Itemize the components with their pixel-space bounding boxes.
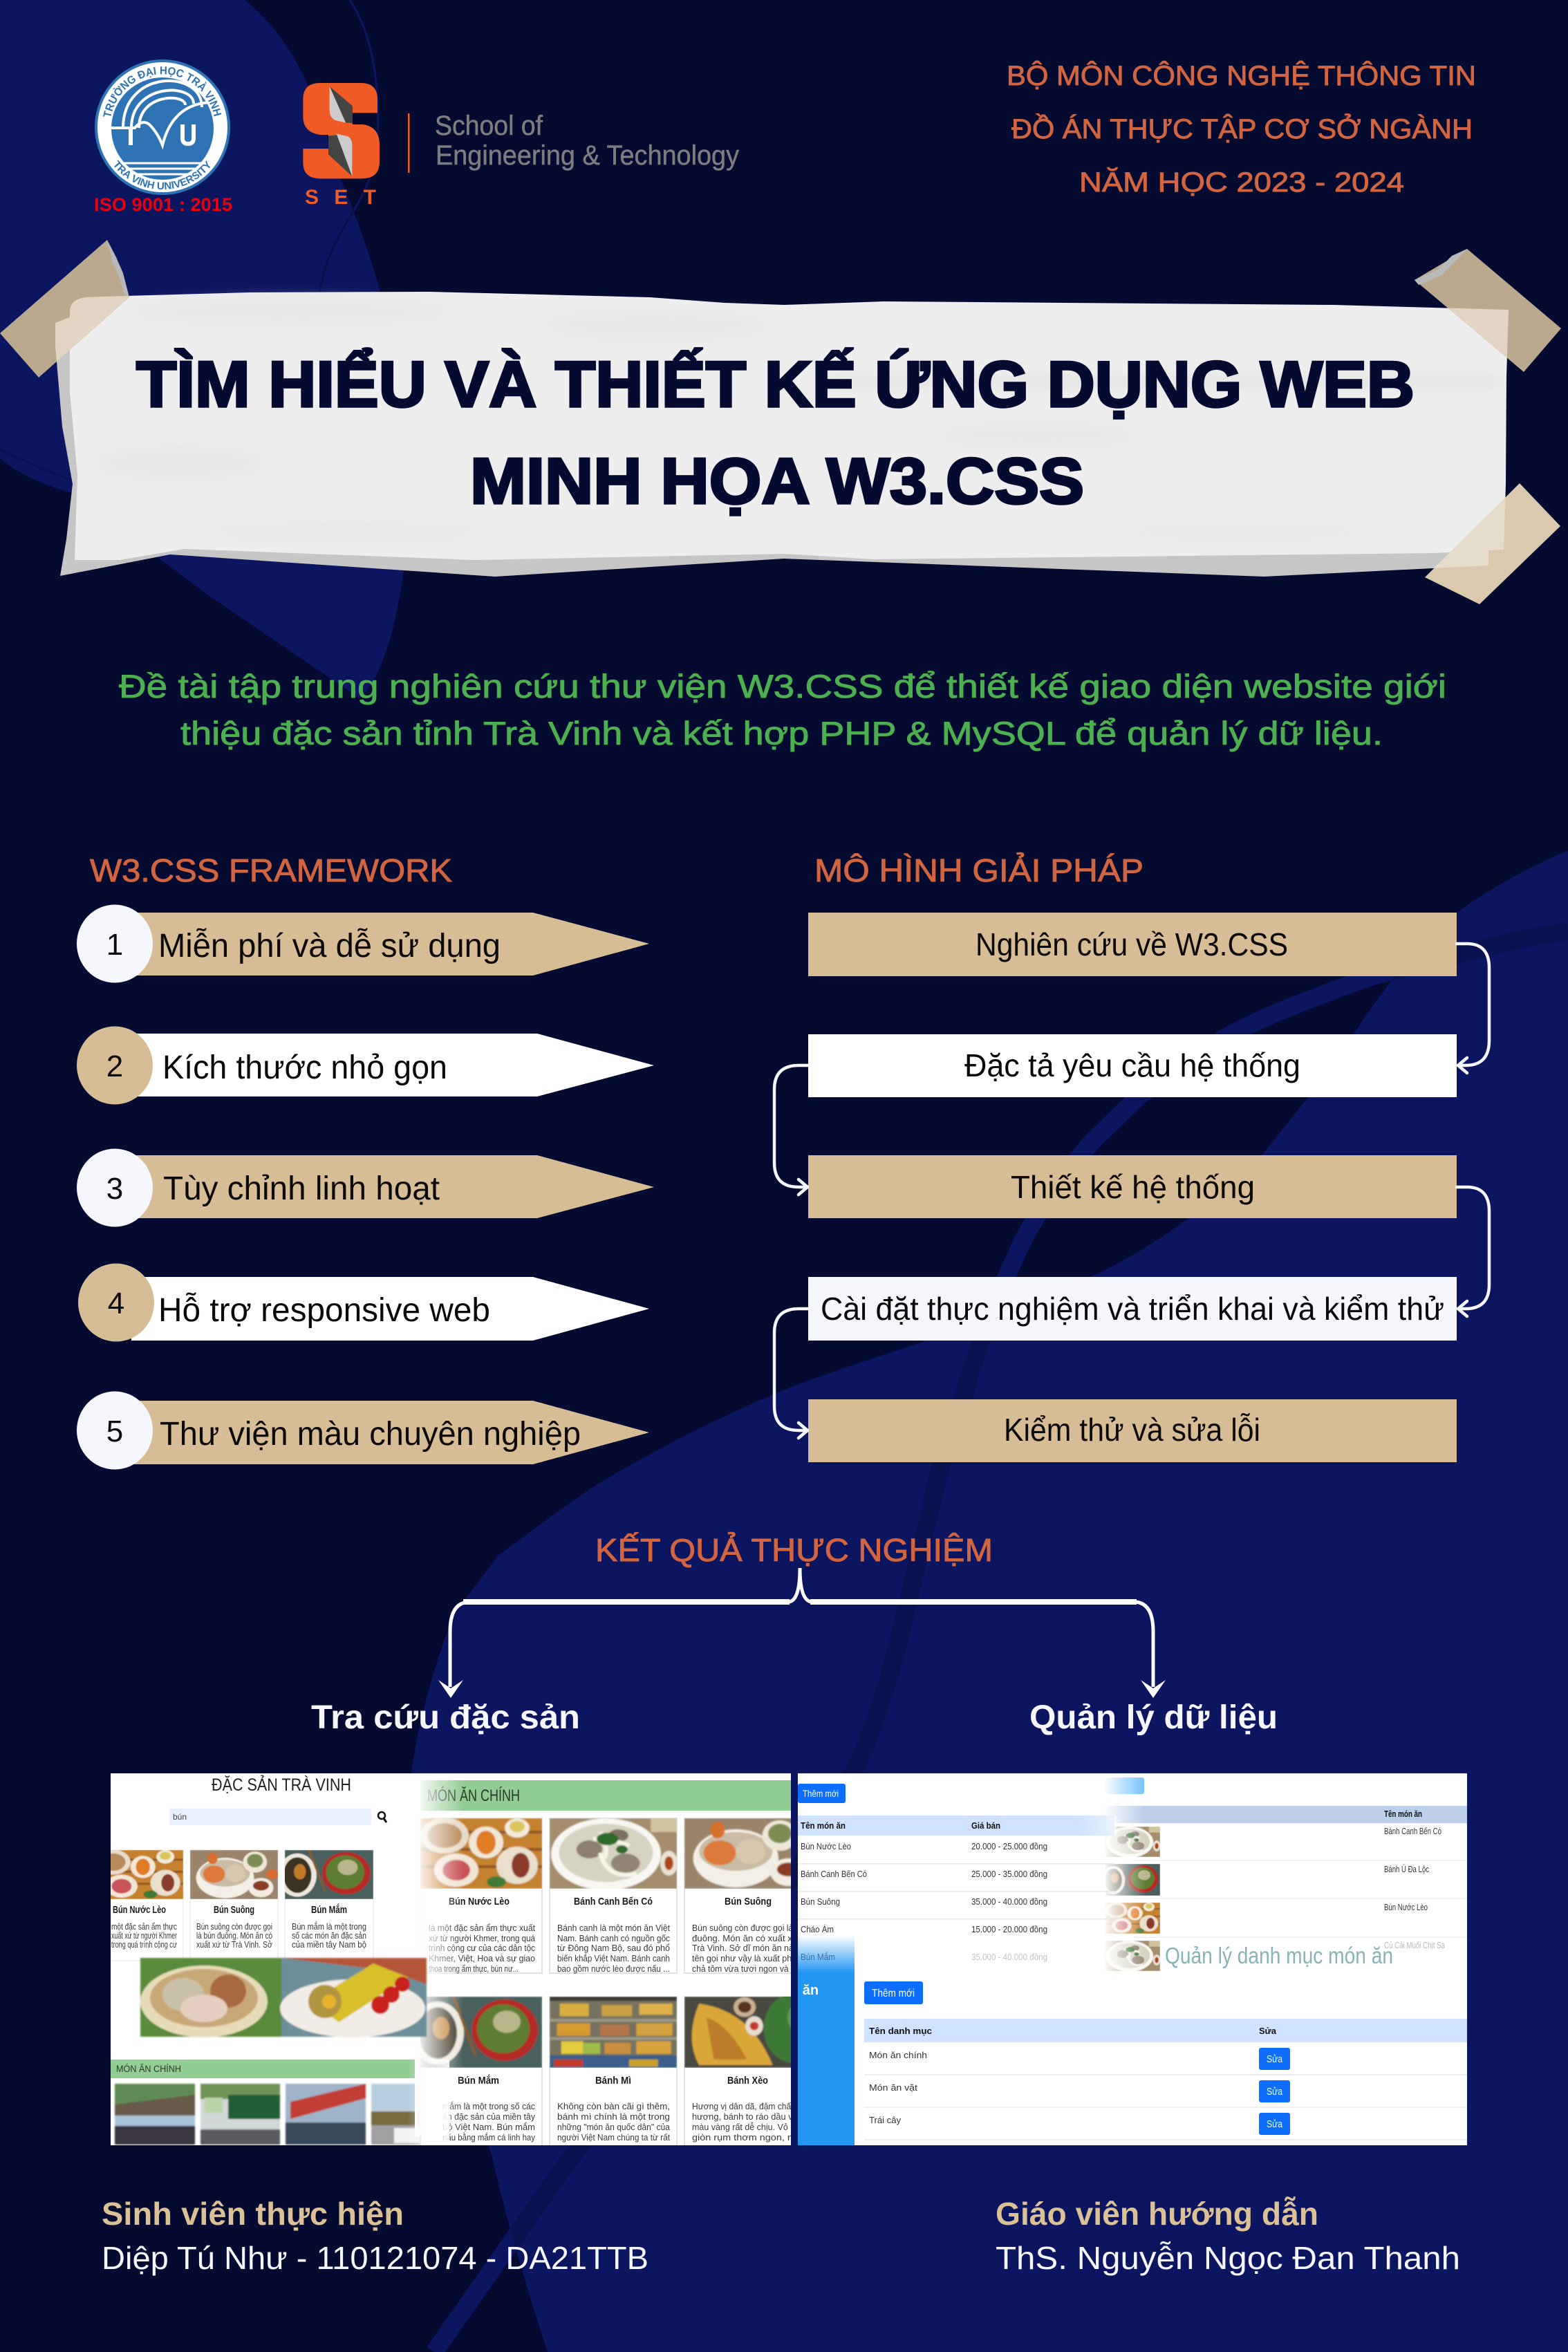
products table: Bánh Canh Bến Có bbox=[801, 1869, 867, 1879]
logo: Tra Vinh University bbox=[94, 59, 232, 215]
item 3: 3 bbox=[106, 1172, 123, 1206]
small cards: một đặc sản ẩm thực bbox=[111, 1921, 177, 1932]
subtitle bbox=[119, 668, 1446, 752]
heading: W3.CSS framework: W3.CSS FRAMEWORK bbox=[90, 852, 452, 888]
banner: featured dishes bbox=[140, 1958, 427, 2037]
item 3 bbox=[77, 1149, 654, 1226]
category table: Trái cây bbox=[869, 2115, 902, 2125]
green bar right: MÓN ĂN CHÍNH bbox=[427, 1786, 520, 1805]
second table top right: Bánh Canh Bến Có bbox=[1384, 1826, 1441, 1836]
cards row 2: người Việt Nam chúng ta từ rất bbox=[557, 2132, 670, 2143]
products table: 20.000 - 25.000 đồng bbox=[971, 1841, 1047, 1851]
products table: Tên món ăn bbox=[801, 1820, 846, 1831]
step 1: Nghiên cứu về W3.CSS bbox=[976, 926, 1288, 962]
cards row 1: đuông. Món ăn có xuất xứ từ bbox=[692, 1933, 810, 1943]
products table: Giá bán bbox=[971, 1820, 1000, 1831]
cards row 2: những "món ăn quốc dân" của bbox=[557, 2122, 671, 2132]
step 5 bbox=[808, 1399, 1457, 1462]
fade overlays bbox=[408, 1777, 463, 2145]
products table: 35.000 - 40.000 đồng bbox=[971, 1896, 1047, 1907]
footer: supervisor: ThS. Nguyễn Ngọc Đan Thanh bbox=[996, 2240, 1460, 2276]
cards row 1: biến khắp Việt Nam. Bánh canh bbox=[557, 1953, 670, 1963]
small cards: Bún suông còn được gọi bbox=[196, 1921, 272, 1932]
cards row 2: màu vàng rất dễ chịu. Vỏ bánh bbox=[692, 2122, 810, 2132]
step 3: Thiết kế hệ thống bbox=[1011, 1169, 1255, 1205]
item 4: 4 bbox=[108, 1287, 124, 1320]
cards row 1: Bún Nước Lèo bbox=[449, 1896, 510, 1907]
logo: Tra Vinh University: TRA VINH UNIVERSITY bbox=[114, 160, 210, 189]
item 5: Thư viện màu chuyên nghiệp bbox=[160, 1416, 581, 1453]
small cards: Bún Mắm bbox=[311, 1903, 347, 1916]
second table top right: Tên món ăn bbox=[1384, 1809, 1422, 1819]
logo: Tra Vinh University: ISO 9001 : 2015 bbox=[94, 194, 232, 215]
products table: 15.000 - 20.000 đồng bbox=[971, 1924, 1047, 1934]
cards row 2: giòn rụm thơm ngon, nhân bbox=[692, 2132, 810, 2143]
cards row 1: Bánh canh là một món ăn Việt bbox=[557, 1923, 670, 1933]
second table top right: Củ Cải Muối Chịt Sa bbox=[1384, 1940, 1446, 1950]
cards row 2: Hương vị dân dã, đậm chất quê bbox=[692, 2101, 810, 2111]
add button category bbox=[864, 1981, 923, 2004]
footer: student: Sinh viên thực hiện bbox=[102, 2196, 404, 2232]
category table: Tên danh mục bbox=[869, 2026, 932, 2036]
screenshot: admin data management bbox=[790, 1773, 1467, 2145]
second table top right: Bánh Ú Đa Lộc bbox=[1384, 1864, 1429, 1874]
category table: Sửa bbox=[1267, 2118, 1283, 2130]
cards row 1: Bún Suông bbox=[725, 1896, 772, 1907]
second table top right: Bún Nước Lèo bbox=[1384, 1902, 1428, 1912]
cards row 1 bbox=[420, 1818, 816, 1974]
step 2 bbox=[808, 1034, 1457, 1097]
small cards: số các món ăn đặc sản bbox=[292, 1930, 366, 1941]
green bar right bbox=[420, 1780, 791, 1811]
cards row 1: chả tôm vừa tươi ngon và mềm bbox=[692, 1963, 810, 1974]
cards row 2: mắm là một trong số các bbox=[442, 2101, 535, 2111]
flow panel: solution steps bbox=[774, 913, 1489, 1462]
cards row 2: bộ Việt Nam. Bún mắm bbox=[442, 2122, 535, 2132]
cards row 2: ăn đặc sản của miền tây bbox=[442, 2111, 535, 2122]
cards row 2: nấu bằng mắm cá linh hay bbox=[442, 2132, 535, 2143]
subtitle: Đề tài tập trung nghiên cứu thư viện W3.CSS để thiết kế giao diện website giới bbox=[119, 668, 1446, 704]
footer: student: Diệp Tú Như - 110121074 - DA21TTB bbox=[102, 2240, 648, 2276]
small cards: Bún Nước Lèo bbox=[113, 1904, 166, 1916]
cards row 1: Bún suông còn được gọi là bún bbox=[692, 1923, 810, 1933]
cards row 2 bbox=[420, 1996, 791, 2145]
title line 2: MINH HỌA W3.CSS bbox=[470, 445, 1084, 517]
add button category: Thêm mới bbox=[872, 1988, 915, 1999]
cards row 1: từ Đông Nam Bộ, sau đó phổ bbox=[557, 1943, 670, 1953]
item 5: 5 bbox=[106, 1415, 123, 1448]
small cards: Bún Suông bbox=[214, 1904, 254, 1916]
small cards: xuất xứ từ Trà Vinh. Sở bbox=[196, 1939, 272, 1950]
cards row 1: Nam. Bánh canh có nguồn gốc bbox=[557, 1933, 670, 1943]
products table: Bún Nước Lèo bbox=[801, 1841, 851, 1851]
green bar left bbox=[111, 2060, 438, 2078]
screenshot: food search website bbox=[95, 1773, 825, 2156]
step 2: Đặc tả yêu cầu hệ thống bbox=[964, 1047, 1300, 1083]
category table: Sửa bbox=[1267, 2086, 1283, 2098]
cards row 2: hương, bánh to ráo dầu và có bbox=[692, 2111, 810, 2122]
site title: ĐẶC SẢN TRÀ VINH bbox=[212, 1774, 351, 1795]
cards row 1: Trà Vinh. Sở dĩ món ăn này có bbox=[692, 1943, 810, 1953]
products table: Bún Suông bbox=[801, 1896, 840, 1907]
item 3: Tùy chỉnh linh hoạt bbox=[163, 1170, 440, 1207]
item 1: 1 bbox=[106, 928, 123, 962]
products table: 35.000 - 40.000 đồng bbox=[971, 1952, 1047, 1962]
item 4: Hỗ trợ responsive web bbox=[158, 1291, 490, 1329]
search box bbox=[169, 1809, 386, 1825]
tape: bottom right bbox=[1425, 483, 1560, 604]
cards row 1: thoa trong ẩm thực, bún nư... bbox=[429, 1963, 519, 1974]
logo: SET: School of bbox=[435, 111, 543, 141]
cards row 1: tên gọi như vậy là xuất phát từ bbox=[692, 1953, 810, 1963]
cards row 2: Không còn bàn cãi gì thêm, bbox=[557, 2101, 670, 2111]
item 2: 2 bbox=[106, 1049, 123, 1083]
cards row 1: xứ từ người Khmer, trong quá bbox=[429, 1933, 536, 1943]
cards row 2: Bánh Mì bbox=[595, 2075, 631, 2087]
step 3 bbox=[808, 1155, 1457, 1218]
tape: top right bbox=[1415, 249, 1561, 372]
small cards: Bún mắm là một trong bbox=[292, 1921, 366, 1932]
header text: department and year bbox=[1007, 60, 1476, 198]
cards row 2: Bún Mắm bbox=[458, 2074, 499, 2087]
logo: SET: SET bbox=[305, 186, 376, 209]
step 1 bbox=[808, 913, 1457, 976]
cards row 2: Bánh Xèo bbox=[727, 2075, 768, 2087]
category table: Món ăn vặt bbox=[869, 2082, 917, 2093]
paper banner with title bbox=[55, 292, 1509, 577]
cards row 1: bao gồm nước lèo được nấu ... bbox=[557, 1963, 670, 1974]
second table top right bbox=[1101, 1777, 1467, 1972]
heading: solution model: MÔ HÌNH GIẢI PHÁP bbox=[814, 852, 1144, 888]
small cards: trong quá trình cộng cư bbox=[111, 1939, 177, 1950]
header text: department and year: BỘ MÔN CÔNG NGHỆ THÔNG TIN bbox=[1007, 60, 1476, 91]
products table bbox=[798, 1816, 1117, 1962]
logo: SET bbox=[303, 83, 739, 209]
label: data management: Quản lý dữ liệu bbox=[1029, 1699, 1278, 1736]
logo: Tra Vinh University: TRƯỜNG ĐẠI HỌC TRÀ VINH bbox=[103, 66, 221, 117]
small cards: là bún đuông. Món ăn có bbox=[196, 1930, 272, 1941]
search box: bún bbox=[173, 1812, 187, 1822]
products table: 25.000 - 35.000 đồng bbox=[971, 1869, 1047, 1879]
green bar left: MÓN ĂN CHÍNH bbox=[116, 2063, 181, 2074]
item 1: Miễn phí và dễ sử dụng bbox=[158, 927, 501, 964]
brace arrows bbox=[438, 1568, 1166, 1698]
logo: SET: Engineering & Technology bbox=[436, 140, 739, 171]
subtitle: thiệu đặc sản tỉnh Trà Vinh và kết hợp PHP & MySQL để quản lý dữ liệu. bbox=[180, 715, 1383, 752]
background shape: top-left blob bbox=[0, 0, 410, 698]
small cards: xuất xứ từ người Khmer bbox=[111, 1930, 177, 1941]
small cards bbox=[95, 1849, 373, 1961]
category table: Sửa bbox=[1259, 2026, 1277, 2036]
item 2 bbox=[77, 1026, 654, 1105]
add button top: Thêm mới bbox=[803, 1788, 839, 1799]
small cards: của miền tây Nam bộ bbox=[292, 1939, 366, 1950]
category table: Sửa bbox=[1267, 2053, 1283, 2065]
products table: Cháo Ám bbox=[801, 1924, 834, 1934]
cards row 2: bánh mì chính là một trong bbox=[557, 2111, 670, 2122]
cards row 1: Bánh Canh Bến Có bbox=[574, 1896, 653, 1907]
background shape: bottom-right wave bbox=[411, 850, 1568, 2352]
header text: department and year: ĐỒ ÁN THỰC TẬP CƠ SỞ NGÀNH bbox=[1011, 113, 1473, 144]
tape: top left bbox=[0, 240, 129, 377]
item 4 bbox=[78, 1264, 649, 1341]
step 5: Kiểm thử và sửa lỗi bbox=[1004, 1412, 1260, 1448]
item 1 bbox=[77, 904, 649, 983]
cards row 1: Khmer, Việt, Hoa và sự giao bbox=[429, 1953, 535, 1963]
step 4 bbox=[808, 1277, 1457, 1341]
sidebar bbox=[790, 1935, 855, 2145]
category table bbox=[864, 2019, 1467, 2140]
connector arrows bbox=[774, 944, 1489, 1438]
step 4: Cài đặt thực nghiệm và triển khai và kiểm thử bbox=[821, 1291, 1444, 1327]
title line 1: TÌM HIỂU VÀ THIẾT KẾ ỨNG DỤNG WEB bbox=[136, 348, 1415, 420]
section heading: category management: Quản lý danh mục món ăn bbox=[1165, 1943, 1393, 1968]
category table: Món ăn chính bbox=[869, 2050, 927, 2060]
list panel: W3.CSS features bbox=[77, 904, 654, 1470]
header text: department and year: NĂM HỌC 2023 - 2024 bbox=[1079, 167, 1404, 198]
cards row 1: trình cộng cư của các dân tộc bbox=[429, 1943, 535, 1953]
item 5 bbox=[77, 1391, 649, 1470]
footer: supervisor bbox=[996, 2196, 1460, 2276]
footer: supervisor: Giáo viên hướng dẫn bbox=[996, 2196, 1318, 2232]
label: search specialties: Tra cứu đặc sản bbox=[311, 1699, 580, 1736]
heading: experiment results: KẾT QUẢ THỰC NGHIỆM bbox=[595, 1532, 993, 1568]
add button top bbox=[798, 1784, 846, 1803]
sidebar: Bún Mắm bbox=[801, 1952, 835, 1962]
footer: student bbox=[102, 2196, 648, 2276]
shop photos bbox=[115, 2084, 452, 2145]
sidebar: n ăn bbox=[790, 1983, 819, 1998]
cards row 1: là một đặc sản ẩm thực xuất bbox=[429, 1923, 535, 1933]
item 2: Kích thước nhỏ gọn bbox=[162, 1049, 447, 1086]
